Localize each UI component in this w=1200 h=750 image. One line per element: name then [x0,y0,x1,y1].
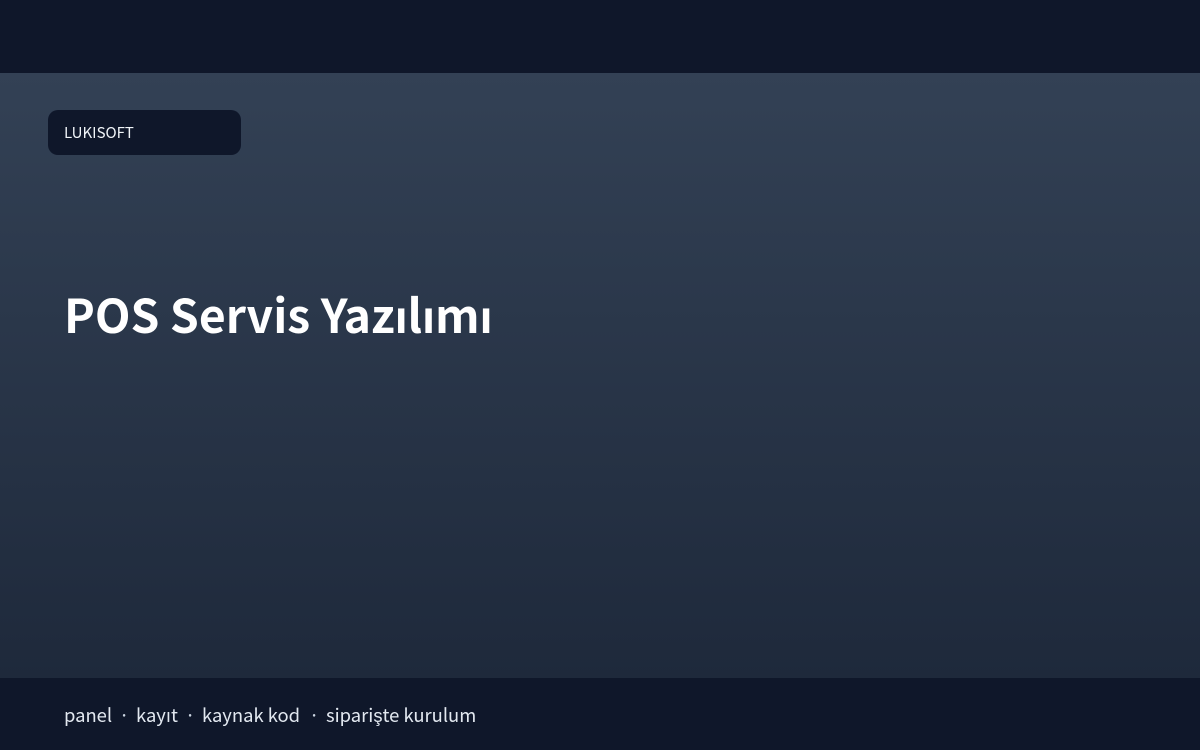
footer keywords: · [309,702,319,728]
footer keywords: · [185,702,195,728]
footer bar [0,678,1200,750]
footer keywords: · [119,702,129,728]
brand badge [48,110,241,155]
footer keywords: kayıt [136,702,178,728]
brand name: LUKISOFT [64,122,134,143]
title: POS Servis Yazılımı [64,280,492,347]
footer keywords: panel [64,702,112,728]
top bar [0,0,1200,73]
footer keywords: kaynak kod [202,702,300,728]
footer keywords: siparişte kurulum [326,702,476,728]
footer keywords [64,702,476,728]
